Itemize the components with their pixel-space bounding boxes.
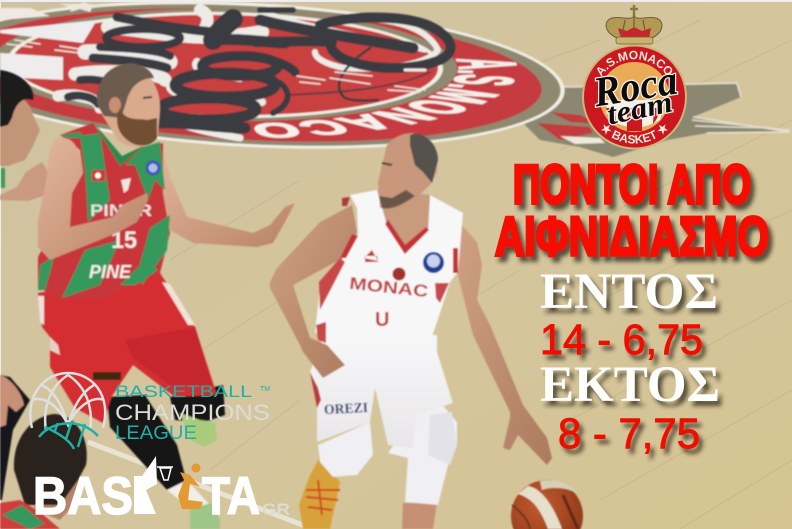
floor logo inner ring (0, 5, 458, 125)
script highlights (58, 10, 438, 138)
spectator hair (14, 414, 87, 505)
shoe (299, 457, 340, 529)
jersey (38, 122, 170, 300)
jersey details (89, 160, 160, 282)
title: points from fast break (495, 153, 769, 267)
errea logo (364, 250, 378, 262)
badge script team: team (604, 86, 675, 132)
head (378, 133, 437, 208)
jersey details: PINE (89, 262, 132, 282)
right lower leg (402, 503, 437, 529)
jersey crest (392, 268, 406, 280)
white sock (167, 480, 210, 510)
icon: league ball (30, 373, 105, 431)
floor logo seam star (405, 68, 425, 72)
stat heading: away: ΕΚΤΟΣ (540, 357, 720, 413)
right arm (458, 223, 552, 465)
stubble (379, 190, 415, 208)
shorts label (93, 372, 121, 380)
right leg tights (388, 402, 457, 505)
beard (117, 108, 157, 146)
black sleeve (0, 375, 30, 500)
shorts sponsor: OREZI (324, 401, 368, 418)
stat value: away: 8 - 7,75 (558, 410, 700, 458)
player: left edge defender (0, 70, 54, 201)
hair (410, 134, 438, 183)
court line bottom left (88, 442, 305, 526)
icon: league net (39, 421, 98, 449)
jersey number: U (375, 309, 389, 331)
script dark strokes (68, 10, 451, 128)
floor logo: A.S. Monaco centre circle (0, 2, 790, 158)
green shoe (190, 503, 220, 529)
jersey details: 15 (111, 227, 137, 254)
floor logo star (60, 2, 110, 12)
basketball (511, 480, 583, 529)
left leg tights (318, 422, 373, 477)
rear knee and shoe (170, 385, 225, 422)
player: Pinar Karsiyaka number 15 (38, 63, 295, 529)
crown (606, 5, 662, 44)
eye (382, 163, 392, 165)
shorts (310, 335, 453, 448)
knee pad (428, 412, 457, 465)
spectator hand (0, 375, 24, 427)
spectator jersey (0, 500, 60, 529)
wooden floor planks (170, 20, 792, 529)
defender jersey scrap (1, 168, 5, 188)
floor logo small letter (0, 8, 50, 20)
floor logo disc (0, 0, 568, 163)
icon: letter K with hoop (134, 456, 173, 514)
floor logo lettering: A.S.MONACO (253, 58, 518, 140)
jersey neckline (386, 221, 428, 253)
eye (143, 97, 152, 98)
player: Monaco number 5 (270, 133, 552, 529)
jersey (315, 190, 463, 345)
floor logo white stripes (0, 20, 97, 80)
wordmark end: TA (202, 467, 260, 526)
jersey trim (340, 234, 358, 258)
jersey details: PINAR (90, 201, 152, 220)
league name line two: CHAMPIONS (115, 400, 270, 425)
club crest: A.S. Monaco Roca Team Basket (582, 5, 687, 150)
neck and chest (377, 190, 430, 250)
stat value: home: 14 - 6,75 (540, 316, 703, 364)
league name: BASKETBALL (115, 382, 252, 401)
domain suffix: GR (262, 500, 290, 519)
badge lower lettering: ★ BASKET ★ (601, 124, 668, 144)
icon: orange jumper (178, 464, 203, 509)
defender arm and hand (0, 162, 54, 201)
basketball champions league patch (423, 252, 444, 273)
stat heading: home: ΕΝΤΟΣ (540, 264, 718, 320)
badge script: Roca (590, 58, 681, 116)
left arm (270, 205, 357, 378)
left arm (38, 138, 148, 260)
hair (97, 63, 154, 118)
spectator neck (30, 470, 80, 520)
black legging (107, 395, 187, 490)
script fine lines (7, 40, 425, 92)
defender hair (0, 70, 33, 127)
floor logo script (7, 10, 451, 138)
wordmark start: BAS (33, 467, 133, 526)
shorts (38, 273, 217, 423)
badge arc lettering: A.S.MONACO (597, 50, 672, 76)
right arm (163, 150, 295, 247)
jersey wordmark: MONAC (348, 274, 429, 301)
logo: basketa.gr (33, 456, 290, 526)
league name line three: LEAGUE (115, 423, 197, 444)
defender face (0, 95, 40, 166)
trademark: TM (260, 386, 270, 393)
player: bottom left spectator and arm (0, 375, 87, 529)
logo: Basketball Champions League (30, 373, 270, 449)
head (100, 65, 160, 147)
badge (582, 44, 687, 150)
ear (109, 97, 121, 113)
floor logo tail swirl (523, 83, 790, 157)
